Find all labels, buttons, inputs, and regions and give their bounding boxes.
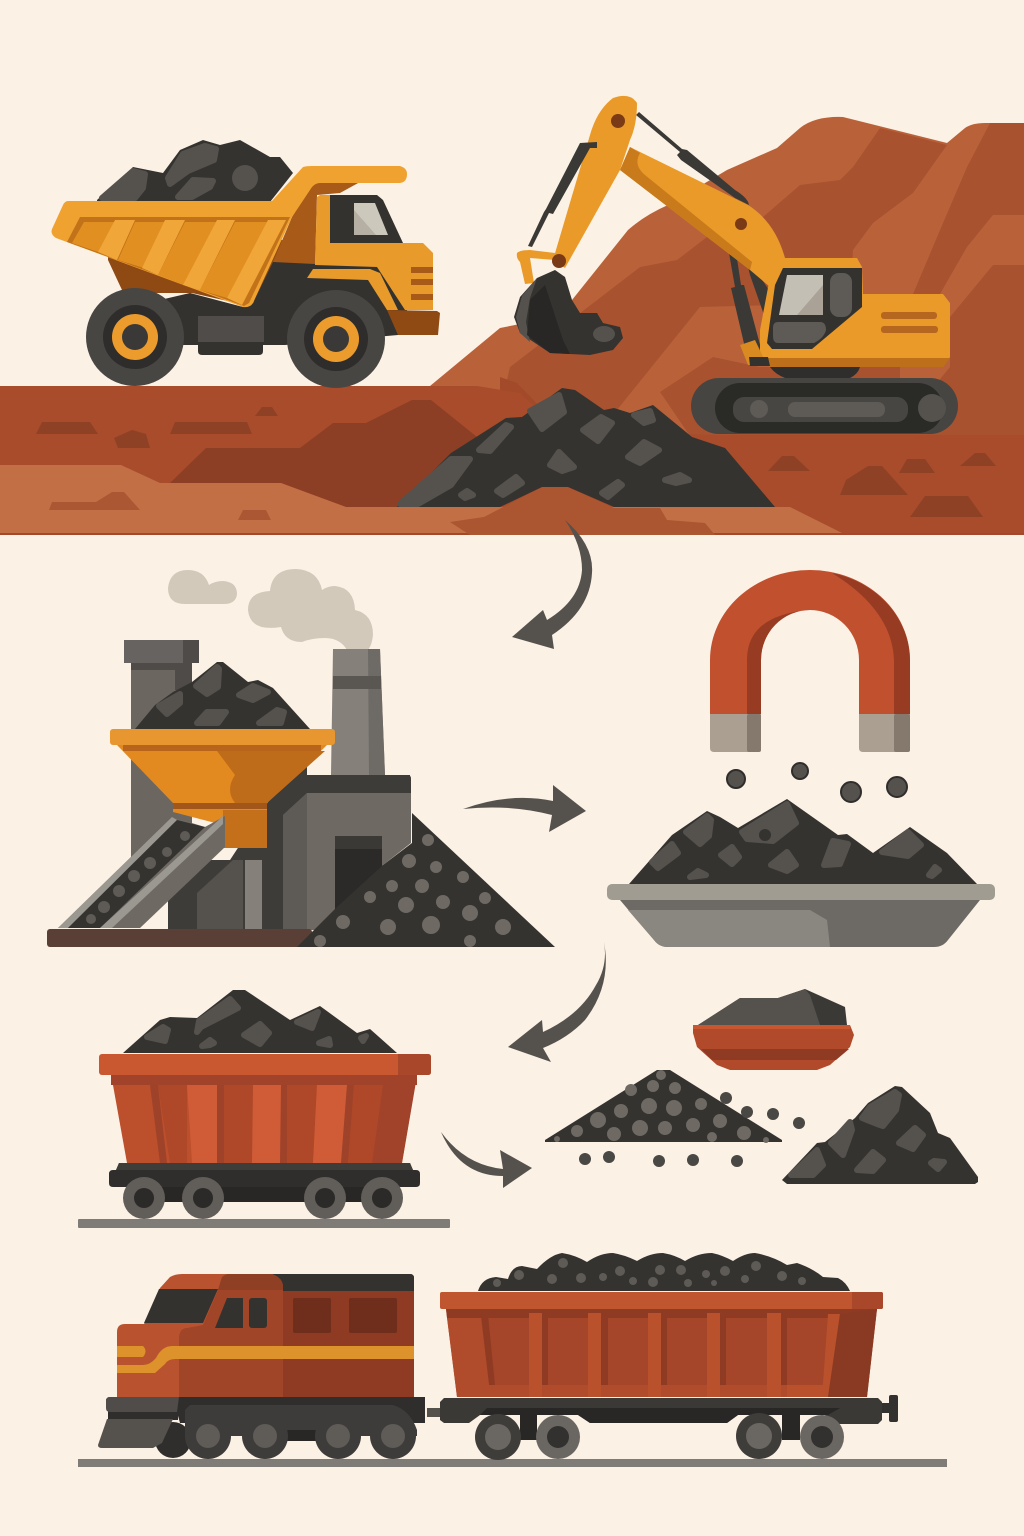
left chimney xyxy=(124,640,199,865)
crushing plant xyxy=(47,640,555,947)
locomotive xyxy=(98,1274,440,1459)
tray coal xyxy=(629,799,977,884)
magnet xyxy=(710,570,910,752)
bucket xyxy=(514,270,623,355)
plant coal pile xyxy=(135,662,310,729)
coal pile: mine xyxy=(397,388,775,507)
excavator body xyxy=(740,258,950,378)
fine gravel pile xyxy=(545,1070,782,1143)
locomotive wheels xyxy=(185,1413,416,1459)
boom arm xyxy=(620,147,785,287)
coarse coal pile xyxy=(782,1086,978,1184)
right chimney xyxy=(331,649,385,775)
falling particles xyxy=(727,763,907,802)
rear cylinders xyxy=(729,226,770,358)
bowl of concentrate xyxy=(693,989,854,1070)
stick arm xyxy=(553,96,637,268)
rear wheel xyxy=(86,288,184,386)
excavator xyxy=(514,96,958,434)
wagon coal xyxy=(123,990,397,1053)
wagon wheels xyxy=(123,1177,403,1219)
separator tray with coal xyxy=(607,799,995,947)
excavator tracks xyxy=(691,378,958,434)
boom cylinder xyxy=(636,112,749,205)
front wheel xyxy=(287,290,385,388)
ore wagon xyxy=(78,990,450,1228)
train track xyxy=(78,1459,947,1467)
freight car xyxy=(440,1253,898,1460)
hopper xyxy=(110,729,335,848)
freight wheels xyxy=(475,1413,844,1460)
smoke clouds xyxy=(168,569,373,650)
arrow: plant to magnet xyxy=(463,785,586,832)
scattered granules xyxy=(579,1092,805,1167)
gravel pile xyxy=(297,813,555,947)
truck coal load xyxy=(97,140,293,202)
arrow: tray to wagon xyxy=(508,942,606,1062)
freight coal load xyxy=(478,1253,850,1291)
arrow: wagon to sorted piles xyxy=(441,1132,532,1188)
arrow: mine to processing xyxy=(512,520,592,649)
conveyor xyxy=(58,816,225,928)
locomotive plow and frame xyxy=(98,1397,425,1458)
dump truck xyxy=(52,140,440,388)
stick cylinder xyxy=(528,142,597,247)
mine landscape xyxy=(0,117,1024,535)
plant base xyxy=(47,929,312,947)
